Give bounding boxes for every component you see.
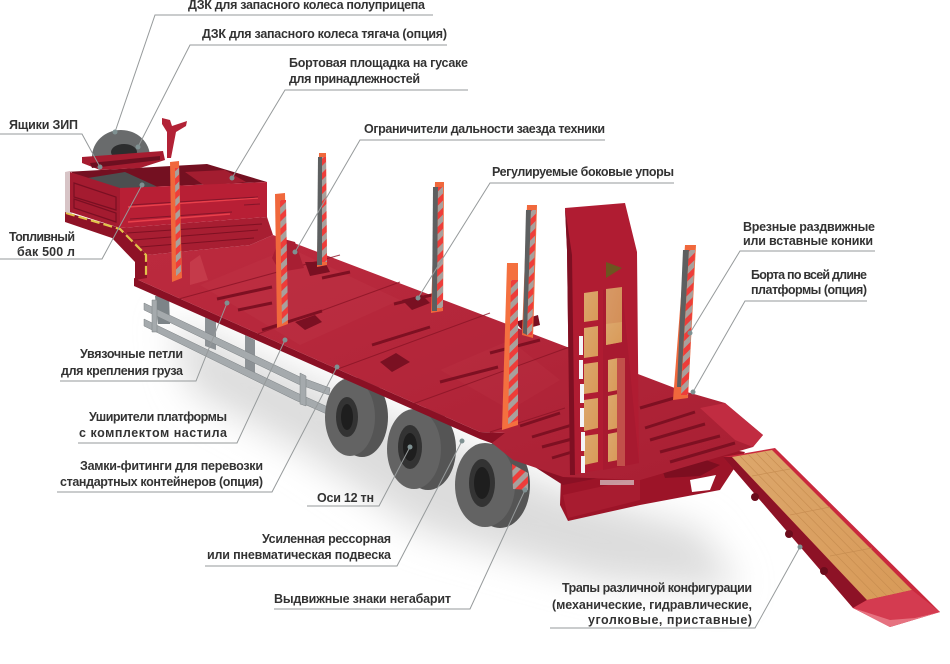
label: gooseneck side platform	[230, 56, 468, 180]
label: container locks: стандартных контейнеров (опция)	[60, 475, 263, 489]
label: insertable stakes: или вставные коники	[743, 234, 873, 248]
platform wideners: side rails	[144, 300, 330, 415]
label: retractable oversize signs	[274, 488, 528, 609]
label: gooseneck side platform: Бортовая площадка на гусаке	[289, 56, 468, 70]
label: tractor spare wheel carrier	[136, 27, 447, 150]
label: full-length side boards	[690, 268, 867, 394]
label: suspension: или пневматическая подвеска	[207, 548, 392, 562]
label: insertable stakes: Врезные раздвижные	[743, 220, 875, 234]
label: fuel tank	[0, 182, 144, 259]
gooseneck box	[65, 164, 267, 228]
label: ramps: Трапы различной конфигурации	[562, 581, 752, 595]
illustration: trailer	[65, 118, 940, 627]
label: lashing loops	[60, 300, 230, 381]
wheels	[325, 377, 530, 528]
label: ramps: уголковые, приставные)	[588, 613, 752, 627]
label: fuel tank: Топливный	[9, 230, 75, 244]
label: suspension: Усиленная рессорная	[262, 532, 391, 546]
label: platform wideners: Уширители платформы	[89, 410, 227, 424]
front landing gear	[135, 258, 255, 378]
label: platform wideners: с комплектом настила	[79, 426, 228, 440]
label: travel limiters	[292, 122, 605, 254]
label: gooseneck side platform: для принадлежностей	[289, 72, 420, 86]
label: tool boxes: Ящики ЗИП	[9, 118, 78, 132]
label: insertable stakes	[688, 220, 875, 336]
label: axles	[307, 444, 412, 506]
label: platform wideners	[78, 338, 288, 443]
label: semi-trailer spare wheel carrier	[112, 0, 433, 134]
side beam	[134, 278, 640, 485]
label: full-length side boards: платформы (опция)	[751, 283, 867, 297]
label: ramps	[550, 544, 802, 628]
label: suspension	[205, 438, 464, 566]
label: tool boxes	[0, 118, 102, 170]
label: lashing loops: Увязочные петли	[80, 347, 183, 361]
rear loading tower	[565, 203, 639, 475]
label: ramps: (механические, гидравлические,	[552, 598, 752, 612]
label: container locks	[57, 364, 340, 492]
rear frame	[560, 448, 745, 521]
label: adjustable side stops: Регулируемые боковые упоры	[492, 165, 674, 179]
label: full-length side boards: Борта по всей длине	[751, 268, 867, 282]
label: lashing loops: для крепления груза	[61, 364, 184, 378]
rear marker sign	[512, 464, 528, 490]
label: tractor spare wheel carrier: ДЗК для запасного колеса тягача (опция)	[202, 27, 447, 41]
label: travel limiters: Ограничители дальности заезда техники	[364, 122, 605, 136]
stakes	[170, 153, 696, 430]
label: adjustable side stops	[416, 165, 674, 300]
label: container locks: Замки-фитинги для перевозки	[80, 459, 263, 473]
label: retractable oversize signs: Выдвижные знаки негабарит	[274, 592, 451, 606]
label: axles: Оси 12 тн	[317, 491, 374, 505]
main platform deck	[134, 235, 763, 480]
ground shadow	[170, 320, 740, 590]
spare wheel and carrier	[82, 118, 187, 170]
gooseneck step	[65, 212, 273, 280]
ramp	[723, 448, 940, 627]
label: fuel tank: бак 500 л	[17, 245, 75, 259]
